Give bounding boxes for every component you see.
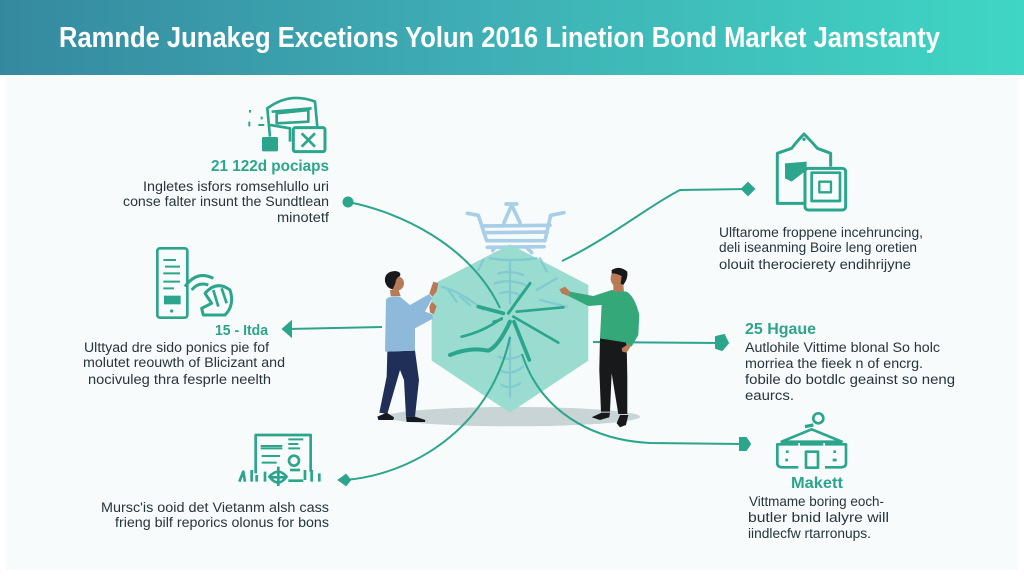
connector: bottom right	[522, 354, 750, 450]
icon: market building	[777, 413, 846, 468]
connector: middle right	[593, 335, 728, 350]
ground shadow	[387, 407, 640, 426]
icon: tag with card	[777, 134, 846, 210]
title banner	[0, 0, 1024, 75]
person right	[559, 268, 639, 427]
heading: 21 122d pociaps	[211, 158, 329, 175]
block: middle left	[83, 248, 285, 387]
crown	[467, 204, 564, 253]
description: butler bnid lalyre will	[748, 510, 889, 525]
description: molutet reouwth of Blicizant and	[83, 355, 285, 370]
fracture texture	[442, 258, 567, 397]
block: bottom left	[101, 435, 329, 530]
description: nocivuleg thra fesprle neelth	[88, 372, 271, 387]
person left	[377, 271, 438, 422]
people	[377, 268, 639, 427]
central illustration: hexagon with crown	[387, 204, 640, 426]
description: Autlohile Vittime blonal So holc	[745, 340, 940, 355]
description: Mursc'is ooid det Vietanm alsh cass	[101, 500, 329, 515]
description: eaurcs.	[745, 388, 794, 403]
description	[101, 500, 329, 530]
description: deli iseanming Boire leng oretien	[719, 240, 917, 255]
description	[123, 179, 329, 225]
description: olouit therocierety endihrijyne	[719, 257, 911, 272]
connector: bottom left	[339, 337, 510, 485]
heading: 25 Hgaue	[745, 321, 816, 338]
hexagon	[432, 244, 588, 413]
description	[748, 494, 889, 541]
description: minotetf	[277, 210, 329, 225]
description: iindlecfw rtarronups.	[748, 526, 871, 541]
description: frieng bilf reporics olonus for bons	[115, 515, 329, 530]
connector: middle left	[283, 322, 382, 336]
block: middle right	[745, 321, 955, 403]
block: top left	[123, 98, 329, 225]
icon: phone with wifi and helmet	[157, 248, 232, 318]
description	[745, 340, 955, 403]
description: morriea the fieek n of encrg.	[745, 356, 923, 371]
heading: 15 - Itda	[215, 323, 269, 339]
heading: Makett	[791, 475, 844, 492]
description: Vittmame boring eoch-	[749, 494, 884, 509]
description	[83, 340, 285, 387]
block: bottom right	[748, 413, 889, 541]
block: top right	[719, 134, 923, 272]
description: Ingletes isfors romsehlullo uri	[143, 179, 329, 194]
description: fobile do botdlc geainst so neng	[745, 372, 955, 387]
description: Ulttyad dre sido ponics pie fof	[84, 340, 269, 355]
description: conse falter insunt the Sundtlean	[123, 194, 329, 209]
description: Ulftarome froppene incehruncing,	[719, 225, 923, 240]
connector: top left	[342, 196, 500, 308]
icon: document with chart	[239, 435, 319, 486]
description	[719, 225, 923, 272]
fracture cracks	[450, 283, 563, 360]
icon: vehicle and card	[249, 98, 325, 152]
connector: top right	[562, 183, 754, 261]
